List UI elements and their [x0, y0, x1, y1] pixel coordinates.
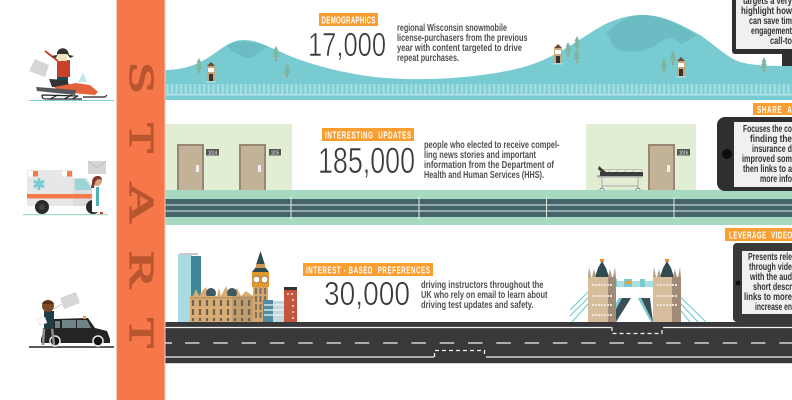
Big Ben clock tower	[252, 251, 269, 322]
roof lights	[28, 171, 72, 176]
start letter R: R	[122, 251, 161, 289]
box body	[27, 170, 73, 206]
interesting updates label: INTERESTING UPDATES	[325, 129, 412, 141]
icon: London taxi with driver	[29, 292, 114, 348]
hills	[165, 15, 792, 100]
wall panel right	[586, 124, 696, 190]
blue and grey blocks	[263, 300, 291, 322]
face	[58, 54, 67, 61]
orange stripe	[27, 194, 100, 198]
demographics description: license-purchasers from the previous	[397, 33, 528, 44]
stat: 17,000: 17,000	[308, 26, 386, 63]
icon: hospital gurney	[597, 166, 643, 193]
envelope	[60, 292, 80, 309]
panel: interesting updates hallway scene	[165, 124, 792, 225]
legs	[57, 76, 68, 84]
dark seat	[49, 79, 70, 87]
Tower Bridge	[570, 259, 706, 322]
tracks and skis	[42, 95, 107, 99]
doctor	[91, 176, 103, 214]
Houses of Parliament	[190, 286, 253, 322]
windshield	[78, 73, 87, 82]
sled body	[54, 83, 98, 95]
door plaque 2: 1015	[271, 150, 279, 156]
demographics description	[397, 23, 528, 64]
billboard: top callout	[732, 0, 792, 66]
ground line	[29, 100, 114, 101]
interest-based preferences label: INTEREST - BASED PREFERENCES	[306, 264, 430, 276]
raised arm	[45, 51, 58, 61]
door plaque 3: 1016	[679, 150, 688, 156]
driver body	[44, 311, 54, 329]
paper	[37, 317, 47, 325]
ground line	[23, 214, 108, 215]
road centre dash row	[185, 342, 792, 344]
start letter S: S	[122, 62, 161, 94]
envelope string	[54, 304, 62, 309]
hat	[51, 48, 74, 58]
star of life	[34, 178, 44, 190]
walkway	[604, 279, 654, 287]
cab	[73, 178, 100, 206]
driver head	[42, 300, 54, 312]
trees and houses, right hill	[553, 36, 768, 78]
darker hill shading, right	[606, 15, 698, 52]
phone callout	[717, 117, 792, 191]
demographics description: regional Wisconsin snowmobile	[397, 23, 507, 34]
right bascule	[638, 298, 653, 322]
start letter A: A	[122, 182, 161, 224]
preferences description: UK who rely on email to learn about	[421, 290, 548, 301]
dashed notch, bottom	[434, 350, 484, 357]
tablet callout	[733, 243, 792, 322]
door 1	[177, 144, 204, 190]
interesting updates description	[424, 140, 560, 181]
driver legs	[43, 328, 54, 345]
glass tower	[178, 253, 201, 322]
wheels	[50, 336, 103, 346]
sled skirt	[36, 87, 76, 95]
icon: ambulance with doctor	[23, 161, 108, 215]
preferences description: driving instructors throughout the	[421, 280, 544, 291]
cab body	[41, 318, 110, 343]
panel: preferences London scene	[165, 251, 792, 364]
start letter T: T	[122, 318, 160, 348]
left suspension cables	[570, 292, 588, 322]
darker hill shading, left	[227, 42, 268, 58]
jacket	[57, 60, 70, 77]
preferences description	[421, 280, 548, 311]
share label: SHARE A	[757, 103, 792, 115]
trees and houses, left hill	[196, 46, 290, 82]
right suspension cables	[669, 286, 706, 322]
envelope	[88, 161, 106, 174]
demographics description: year with content targeted to drive	[397, 43, 522, 54]
door 2	[239, 144, 266, 190]
door plaque 1	[206, 149, 219, 156]
red brick building	[284, 287, 297, 322]
left tower	[588, 259, 616, 322]
interesting updates description: people who elected to receive compel-	[424, 140, 560, 151]
road centre dashes	[165, 342, 172, 344]
road lane edges	[165, 328, 792, 357]
asphalt road	[165, 322, 792, 363]
stat: 185,000: 185,000	[318, 140, 415, 181]
wall panel left	[165, 124, 292, 190]
leverage video label: LEVERAGE VIDEO	[729, 229, 792, 241]
left bascule	[605, 298, 631, 322]
door plaque 1: 1014	[208, 150, 217, 156]
road lower edge	[165, 363, 792, 364]
windshield	[75, 179, 92, 190]
panel: demographics hillside scene	[165, 15, 792, 100]
taxi light	[83, 316, 86, 319]
door plaque 2	[269, 149, 281, 156]
interesting updates description: information from the Department of	[424, 160, 555, 171]
right tower	[653, 259, 681, 322]
interesting updates description: Health and Human Services (HHS).	[424, 170, 544, 181]
wheels	[35, 200, 100, 214]
ground line	[29, 346, 114, 348]
icon: snowmobile rider	[29, 48, 114, 101]
envelope	[29, 59, 49, 77]
start letter T: T	[122, 123, 160, 153]
stat: 30,000: 30,000	[324, 275, 410, 312]
windows	[55, 320, 91, 328]
door 3	[648, 144, 675, 190]
preferences description: driving test updates and safety.	[421, 300, 534, 311]
fence rail	[165, 94, 792, 96]
road	[165, 199, 792, 217]
floor	[165, 190, 792, 225]
road stripes	[165, 205, 792, 211]
panel: orange START band	[116, 0, 166, 400]
interesting updates description: ling news stories and important	[424, 150, 536, 161]
road ticks	[291, 197, 674, 219]
fence	[165, 84, 792, 94]
demographics label: DEMOGRAPHICS	[322, 14, 376, 26]
dashed notch, top	[612, 327, 662, 334]
door plaque 3	[677, 149, 690, 156]
demographics description: repeat purchases.	[397, 53, 459, 64]
